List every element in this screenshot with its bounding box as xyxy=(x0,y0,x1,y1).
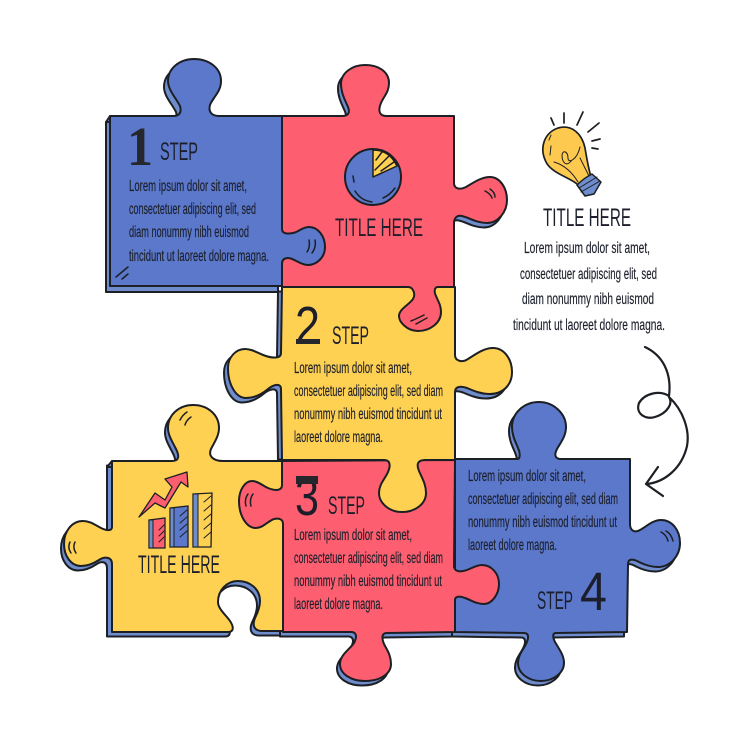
step 3 heading xyxy=(295,467,365,527)
step 3 text: laoreet dolore magna. xyxy=(294,596,383,613)
sidebar text xyxy=(513,240,665,334)
step 1 heading: STEP xyxy=(160,138,198,166)
step 1 text: diam nonummy nibh euismod xyxy=(129,224,249,241)
step 3 text: nonummy nibh euismod tincidunt ut xyxy=(294,573,442,590)
step 3 text: Lorem ipsum dolor sit amet, xyxy=(294,527,412,544)
step 3 heading: 3 xyxy=(295,467,319,527)
step 1 heading xyxy=(127,116,198,177)
step 4 heading: 4 xyxy=(580,562,607,622)
yellow piece title: TITLE HERE xyxy=(138,551,220,579)
step 3 text xyxy=(294,527,443,613)
step 2 text: consectetuer adipiscing elit, sed diam xyxy=(294,383,443,400)
step 2 text xyxy=(294,360,443,446)
step 2 text: Lorem ipsum dolor sit amet, xyxy=(294,360,412,377)
step 1 text: consectetuer adipiscing elit, sed xyxy=(129,201,256,218)
step 2 text: nonummy nibh euismod tincidunt ut xyxy=(294,406,442,423)
sidebar text: Lorem ipsum dolor sit amet, xyxy=(524,240,650,257)
step 3 text: consectetuer adipiscing elit, sed diam xyxy=(294,550,443,567)
arrow: curly pointer to step 4 xyxy=(638,347,688,496)
step 1 heading: 1 xyxy=(127,116,153,177)
sidebar title: TITLE HERE xyxy=(543,204,631,232)
red piece title: TITLE HERE xyxy=(335,214,423,242)
step 4 text: Lorem ipsum dolor sit amet, xyxy=(468,468,586,485)
icon: light bulb xyxy=(543,112,601,196)
puzzle piece: red chart title xyxy=(282,65,507,331)
step 4 text xyxy=(468,468,618,554)
icon: bar chart with arrow xyxy=(139,472,212,548)
icon: pie chart xyxy=(345,149,401,205)
step 1 text: Lorem ipsum dolor sit amet, xyxy=(129,178,247,195)
step 2 heading xyxy=(295,296,369,356)
puzzle piece: yellow step 2 xyxy=(228,287,512,512)
step 4 text: nonummy nibh euismod tincidunt ut xyxy=(468,514,617,531)
step 4 heading: STEP xyxy=(537,587,573,615)
step 4 text: laoreet dolore magna. xyxy=(468,537,557,554)
step 1 text: tincidunt ut laoreet dolore magna. xyxy=(129,248,269,265)
step 4 text: consectetuer adipiscing elit, sed diam xyxy=(468,491,618,508)
puzzle piece: red step 3 xyxy=(239,460,499,681)
step 4 heading xyxy=(537,562,607,622)
sidebar text: diam nonummy nibh euismod xyxy=(522,291,654,308)
sidebar text: consectetuer adipiscing elit, sed xyxy=(520,266,657,283)
puzzle piece: blue step 1 xyxy=(110,59,325,286)
step 2 heading: 2 xyxy=(295,296,320,356)
step 1 text xyxy=(129,178,269,265)
puzzle piece: blue step 4 xyxy=(455,402,680,681)
step 2 heading: STEP xyxy=(332,322,369,350)
step 3 heading: STEP xyxy=(328,492,365,520)
puzzle piece: yellow title piece xyxy=(64,405,283,632)
step 2 text: laoreet dolore magna. xyxy=(294,429,383,446)
puzzle shadow layer xyxy=(61,65,677,686)
